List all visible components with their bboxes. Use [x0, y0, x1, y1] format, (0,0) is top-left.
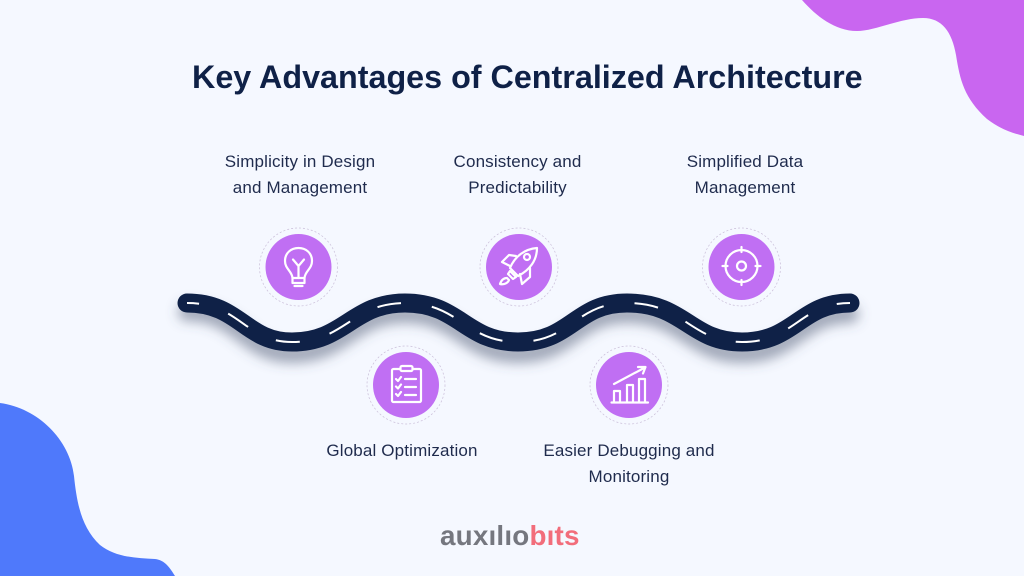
label: Simplicity in Design and Management: and Management — [233, 178, 367, 197]
label: Consistency and Predictability: Predictability — [468, 178, 567, 197]
logo: auxiliobits: auxılıobıts — [440, 520, 580, 551]
icon: clipboard checklist — [367, 346, 445, 424]
label: Easier Debugging and Monitoring — [543, 441, 715, 486]
label: Easier Debugging and Monitoring: Easier Debugging and — [543, 441, 715, 460]
label: Consistency and Predictability: Consistency and — [454, 152, 581, 171]
icon: target — [702, 228, 780, 306]
icon: rocket — [480, 228, 558, 306]
label: Simplified Data Management — [687, 152, 804, 197]
label: Easier Debugging and Monitoring: Monitoring — [589, 467, 669, 486]
label: Consistency and Predictability — [454, 152, 581, 197]
road — [187, 303, 850, 354]
blob: bottom left blue — [0, 403, 175, 576]
label: Simplified Data Management: Management — [695, 178, 795, 197]
label: Simplicity in Design and Management — [225, 152, 375, 197]
label: Simplicity in Design and Management: Simplicity in Design — [225, 152, 375, 171]
blob: top right purple — [802, 0, 1024, 136]
label: Simplified Data Management: Simplified Data — [687, 152, 803, 171]
title: Key Advantages of Centralized Architecture — [192, 59, 863, 95]
icon: rising bar chart — [590, 346, 668, 424]
label: Global Optimization: Global Optimization — [326, 441, 478, 460]
icon: light bulb — [260, 228, 338, 306]
